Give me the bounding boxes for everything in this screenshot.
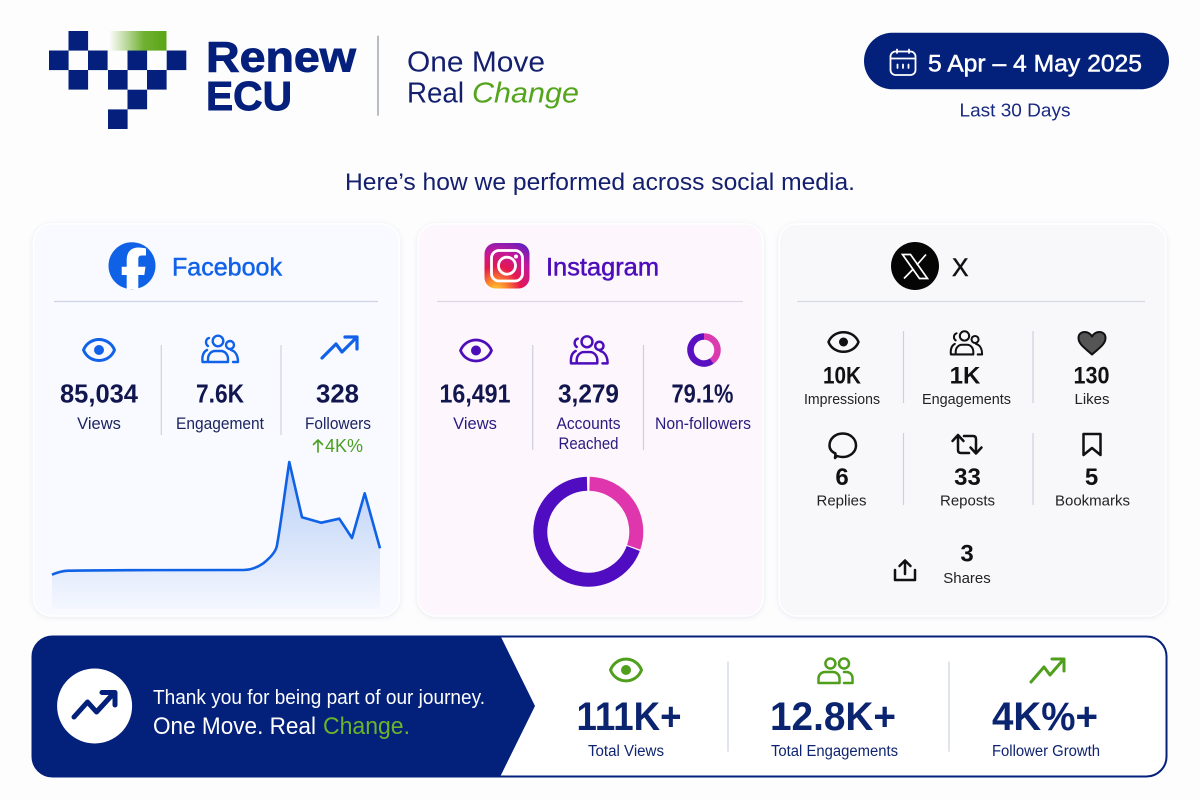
motto: [153, 713, 410, 740]
motto: Change.: [323, 713, 410, 740]
metric: views: Views: [77, 415, 121, 433]
metric: followers: 328: [316, 379, 359, 409]
metric: accounts reached: Reached: [558, 435, 618, 453]
metric: views: 16,491: [440, 379, 510, 409]
metric: replies: [816, 434, 867, 510]
date caption: Last 30 Days: [960, 100, 1070, 121]
chart: donut: [540, 484, 636, 580]
metric: views: [440, 340, 510, 433]
metric: accounts reached: [556, 336, 620, 453]
metric: shares: [895, 541, 991, 587]
total: engagements: 12.8K+: [770, 695, 896, 739]
total: engagements: Total Engagements: [771, 743, 898, 760]
metric: likes: [1074, 332, 1110, 408]
icon: X: [891, 242, 939, 290]
wordmark: ECU: [206, 73, 292, 119]
tagline: Change: [472, 77, 579, 109]
thank you text: Thank you for being part of our journey.: [153, 687, 485, 709]
metric: replies: 6: [835, 464, 849, 491]
metric: engagements: [922, 331, 1011, 408]
heading: Facebook: Facebook: [172, 254, 282, 282]
total: follower growth: Follower Growth: [992, 743, 1100, 760]
metric: engagement: [176, 336, 264, 433]
icon: Facebook: [108, 242, 156, 289]
banner: summary: [32, 636, 1166, 777]
logo: RenewECU: [49, 31, 579, 129]
metric: accounts reached: 3,279: [558, 379, 619, 409]
date text: 5 Apr – 4 May 2025: [928, 51, 1142, 78]
wordmark: Renew: [206, 34, 357, 82]
metric: engagement: 7.6K: [196, 379, 244, 409]
metric: accounts reached: Accounts: [556, 415, 620, 433]
metric: followers: Followers: [305, 415, 371, 433]
icon: growth: [57, 668, 132, 744]
metric: reposts: Reposts: [940, 493, 995, 510]
metric: likes: 130: [1074, 362, 1110, 389]
metric: replies: Replies: [816, 493, 867, 510]
metric: engagements: 1K: [950, 362, 981, 389]
wordmark: [206, 34, 357, 119]
metric: followers: [305, 337, 371, 456]
icon: Instagram: [484, 243, 530, 288]
total: views: 111K+: [576, 695, 682, 739]
metric: shares: 3: [960, 541, 974, 568]
metric: non-followers: Non-followers: [655, 415, 751, 433]
total: follower growth: [992, 659, 1100, 760]
metric: reposts: [940, 435, 995, 510]
metric: shares: Shares: [943, 570, 991, 587]
tagline: [407, 47, 579, 109]
heading: X: X: [952, 254, 969, 282]
icon: calendar: [890, 50, 916, 75]
panel: Instagram: [418, 224, 763, 616]
motto: One Move. Real: [153, 713, 316, 740]
metric: bookmarks: 5: [1085, 464, 1098, 491]
metric: non-followers: 79.1%: [672, 379, 734, 409]
tagline: One Move: [407, 47, 545, 79]
tagline: Real: [407, 77, 464, 109]
metric: engagement: Engagement: [176, 415, 264, 433]
subtitle: Here’s how we performed across social media.: [345, 169, 855, 196]
metric: non-followers: [655, 336, 751, 433]
metric: views: [60, 340, 139, 433]
metric: reposts: 33: [954, 464, 981, 491]
panel: Facebook: [34, 224, 400, 616]
follower growth: 4K%: [325, 436, 363, 456]
heading: Instagram: Instagram: [546, 254, 659, 282]
metric: bookmarks: [1055, 434, 1130, 510]
chart: views over time: [52, 462, 380, 609]
total: views: [576, 659, 682, 760]
total: follower growth: 4K%+: [992, 695, 1098, 739]
panel: X: [779, 224, 1166, 616]
metric: likes: Likes: [1074, 391, 1110, 408]
date range pill: [864, 33, 1169, 89]
metric: impressions: Impressions: [804, 391, 880, 408]
icon: checker mark: [49, 31, 186, 129]
metric: views: Views: [453, 415, 497, 433]
banner: thank you arrow: [32, 636, 535, 777]
metric: views: 85,034: [60, 379, 139, 409]
divider: [377, 36, 379, 116]
metric: impressions: [804, 332, 880, 408]
metric: engagements: Engagements: [922, 391, 1011, 408]
total: views: Total Views: [588, 743, 664, 760]
total: engagements: [770, 658, 898, 760]
metric: bookmarks: Bookmarks: [1055, 493, 1130, 510]
metric: impressions: 10K: [823, 362, 862, 389]
